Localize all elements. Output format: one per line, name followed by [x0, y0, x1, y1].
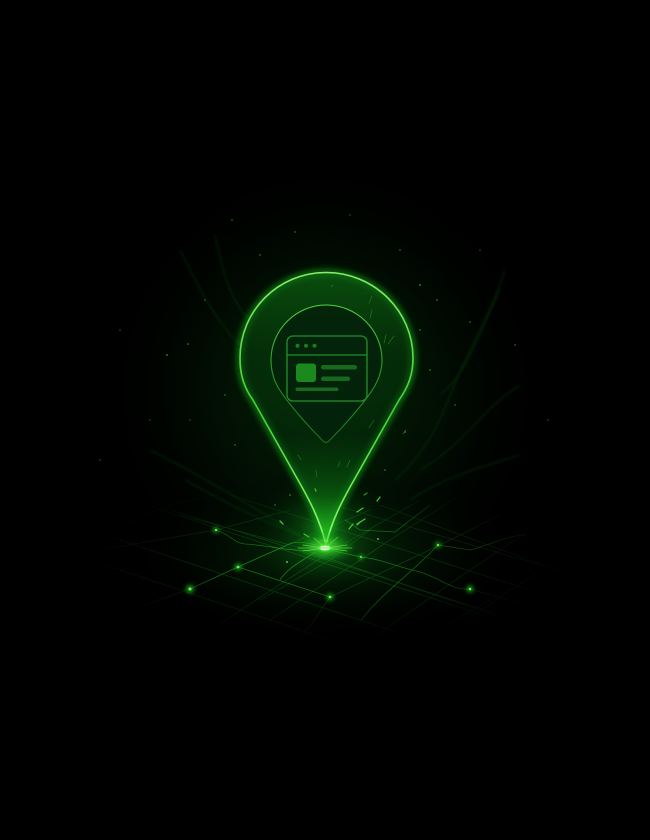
- window dots: [296, 344, 316, 348]
- glowing network nodes: [186, 527, 474, 600]
- icon: browser window: [287, 336, 367, 401]
- pin: outer body: [240, 272, 413, 545]
- image block: [296, 364, 316, 382]
- illustration: glowing location pin over a grid: [99, 214, 549, 636]
- energy wisps: [150, 235, 520, 540]
- sparks rising from the tip: [280, 489, 380, 537]
- pin: outer glow: [240, 272, 413, 545]
- star particles: [99, 214, 549, 506]
- window frame: [287, 336, 367, 401]
- bright traces: [190, 505, 525, 620]
- ambient glow: [100, 155, 550, 640]
- window header divider: [287, 354, 367, 356]
- pin: inner dark core: [271, 305, 382, 442]
- ground grid: [108, 495, 542, 636]
- dust inside pin: [298, 285, 406, 477]
- grid lines: faint network: [108, 495, 542, 636]
- light burst at the pin tip: [293, 518, 357, 564]
- text lines: [296, 365, 357, 391]
